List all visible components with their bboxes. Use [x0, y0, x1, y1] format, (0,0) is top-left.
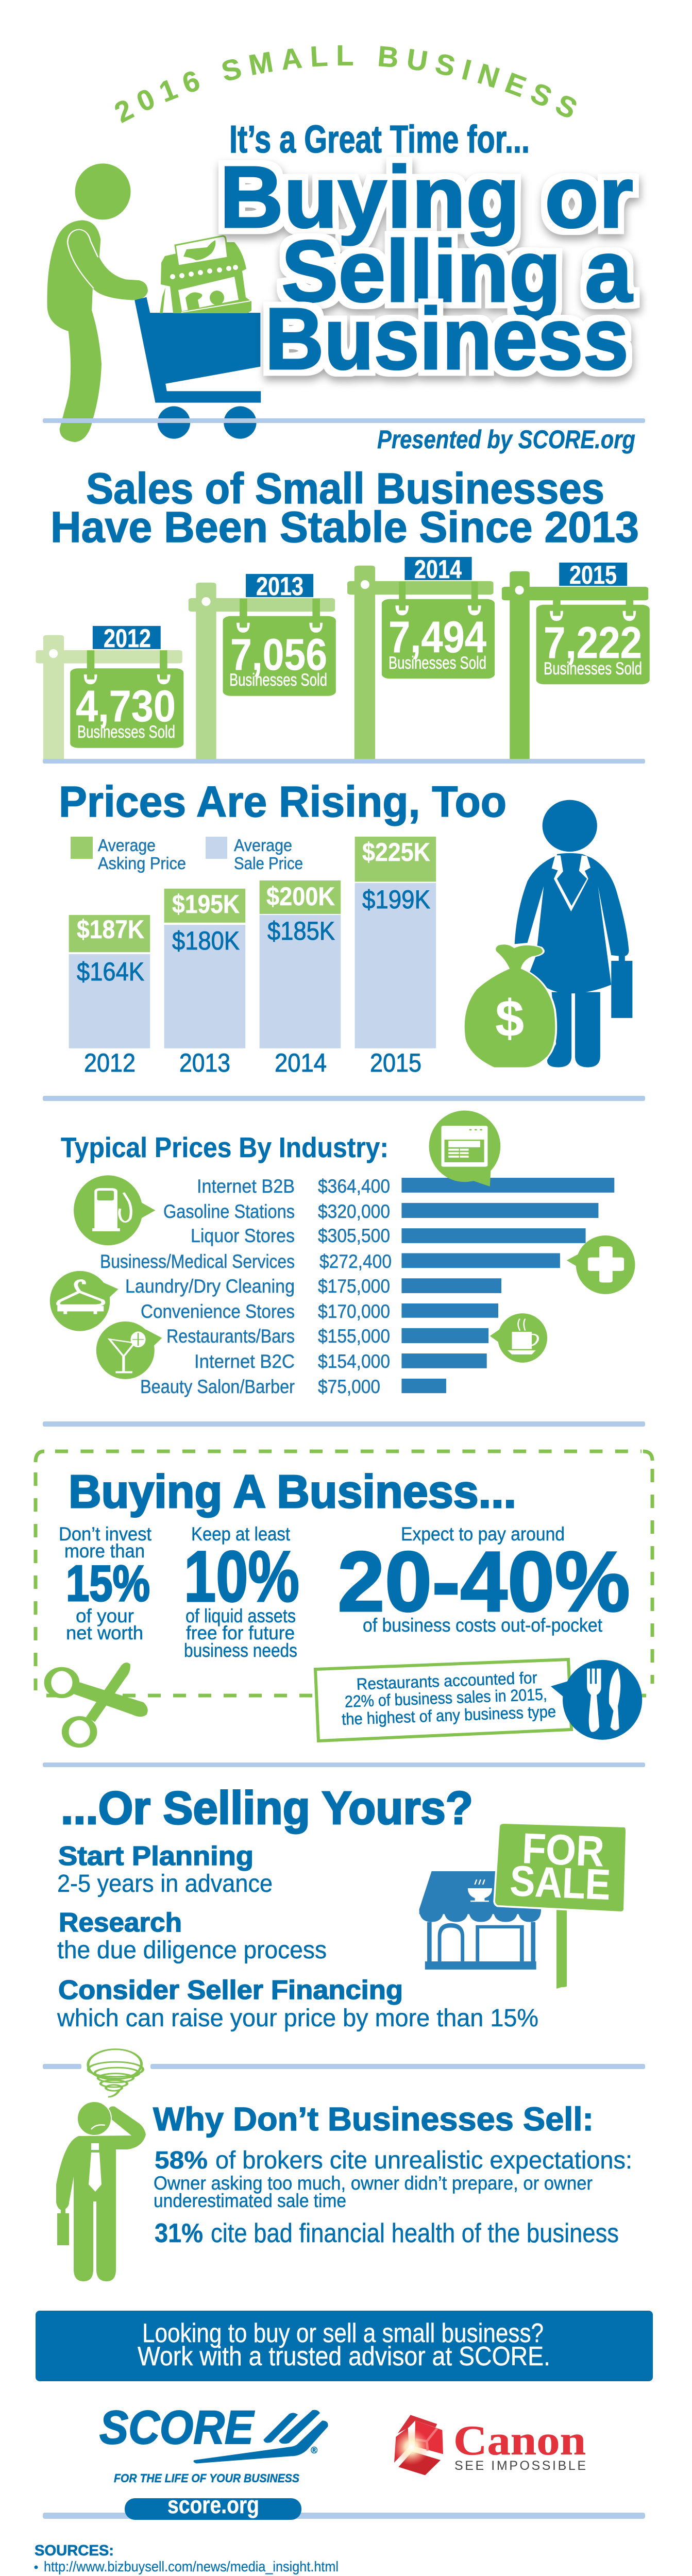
bar chart: typical prices by industry: Gasoline Stations	[163, 1201, 295, 1222]
Canon logo: Canon	[453, 2417, 586, 2464]
bar chart: typical prices by industry: Business/Medical Services	[100, 1251, 295, 1272]
signpost 2012	[36, 624, 183, 759]
stat: 10 percent	[184, 1523, 299, 1661]
main title: Buying or Selling a Business	[220, 148, 633, 388]
bar chart: typical prices by industry: $155,000	[318, 1326, 390, 1347]
signpost 2012: Businesses Sold	[77, 722, 175, 742]
signpost 2013: 2013	[256, 572, 303, 601]
shopping cart	[134, 297, 261, 439]
sources	[34, 2543, 538, 2576]
heading: sales of small businesses: Have Been Stable Since 2013	[50, 503, 639, 551]
stat: 15 percent: of your	[76, 1605, 134, 1626]
arched heading: 2016 small business: 2016 SMALL BUSINESS	[115, 45, 576, 123]
shop sign with croissant	[175, 236, 228, 266]
divider with score.org pill: score.org	[167, 2492, 259, 2518]
bar chart: typical prices by industry: Liquor Stores	[191, 1225, 295, 1246]
dashed cut-out border	[36, 1451, 652, 1696]
signpost 2012: 4,730	[76, 682, 176, 731]
SCORE logo: SCORE	[99, 2401, 255, 2454]
callout: restaurants: Restaurants accounted for	[356, 1668, 537, 1693]
bar chart: asking and sale prices: $200K	[266, 882, 335, 911]
SCORE logo: ®	[311, 2445, 317, 2455]
signpost 2013	[189, 572, 336, 759]
stat: 58 percent: 58%	[155, 2147, 208, 2174]
callout: restaurants: 22% of business sales in 2015,	[344, 1685, 547, 1711]
shopper figure	[47, 163, 148, 442]
heading: why don't businesses sell: Why Don’t Businesses Sell:	[153, 2100, 594, 2138]
scribble	[78, 2044, 151, 2097]
stat: 15 percent: Don’t invest	[59, 1523, 152, 1545]
legend: Average	[234, 836, 292, 855]
main title: Buying or Selling a Business: Buying or	[220, 148, 633, 246]
icon: worried person with scribble	[56, 2044, 151, 2281]
signpost 2012: 2012	[104, 624, 151, 653]
signpost 2014	[347, 555, 495, 759]
callout: restaurants: the highest of any business type	[342, 1702, 556, 1728]
person	[56, 2102, 146, 2281]
tip: seller financing: Consider Seller Financing	[58, 1975, 403, 2005]
bar chart: typical prices by industry: Restaurants/Bars	[166, 1326, 295, 1347]
stat: 20-40 percent: of business costs out-of-pocket	[363, 1615, 603, 1636]
bar chart: typical prices by industry: Convenience Stores	[141, 1301, 295, 1322]
money bag	[465, 944, 555, 1067]
stat: 10 percent: free for future	[186, 1622, 295, 1643]
bar chart: typical prices by industry: $154,000	[318, 1351, 390, 1372]
bar chart: typical prices by industry: $272,400	[319, 1251, 392, 1272]
bar chart: typical prices by industry	[100, 1176, 614, 1397]
bar chart: typical prices by industry: $364,400	[318, 1176, 390, 1197]
tip: start planning: 2-5 years in advance	[57, 1870, 273, 1897]
main title: Buying or Selling a Business: Selling a	[281, 223, 633, 320]
legend	[71, 836, 303, 873]
tip: seller financing	[57, 1975, 538, 2032]
signpost 2015	[502, 561, 650, 759]
chart: for-sale signposts of businesses sold	[36, 555, 650, 759]
main title: Buying or Selling a Business: Business	[265, 290, 629, 388]
bar chart: typical prices by industry: Laundry/Dry Cleaning	[125, 1276, 295, 1297]
tip: start planning: Start Planning	[58, 1841, 254, 1871]
panel: buying a business	[36, 1451, 652, 1745]
Canon logo: SEE IMPOSSIBLE	[454, 2459, 586, 2473]
signpost 2013: 7,056	[230, 630, 327, 680]
bar chart: asking and sale prices: $187K	[77, 915, 144, 944]
signpost 2013: Businesses Sold	[229, 670, 327, 690]
bar chart: asking and sale prices: 2014	[275, 1048, 327, 1077]
sources: http://www.bizbuysell.com/news/media_insight.html	[44, 2558, 339, 2574]
presented by line: Presented by SCORE.org	[377, 425, 635, 454]
call-to-action banner: Work with a trusted advisor at SCORE.	[138, 2342, 550, 2371]
call-to-action banner: Looking to buy or sell a small business?	[142, 2318, 544, 2348]
bar chart: typical prices by industry: $175,000	[318, 1276, 390, 1297]
icon: coffee cup bubble	[490, 1313, 547, 1363]
tip: research	[57, 1908, 327, 1964]
icon: for sale sign: SALE	[509, 1857, 612, 1909]
bar chart: typical prices by industry: $320,000	[318, 1201, 390, 1222]
heading: prices are rising: Prices Are Rising, Too	[59, 777, 507, 826]
awning scallops	[170, 265, 238, 279]
stat: 31 percent: 31%	[155, 2218, 203, 2248]
stat: 10 percent: 10%	[184, 1536, 299, 1617]
heading: typical prices by industry: Typical Prices By Industry:	[61, 1131, 389, 1163]
stat: 10 percent: business needs	[184, 1640, 297, 1661]
icon: storefront	[419, 1871, 541, 1970]
SCORE logo: FOR THE LIFE OF YOUR BUSINESS	[114, 2471, 300, 2485]
heading: sales of small businesses	[50, 464, 639, 551]
icon: martini bubble	[96, 1321, 162, 1379]
bar chart: asking and sale prices: $199K	[362, 885, 430, 914]
stat: 15 percent: net worth	[66, 1622, 143, 1643]
icon: gas pump bubble	[74, 1175, 155, 1245]
signpost 2015: Businesses Sold	[544, 659, 642, 679]
signpost 2014: 2014	[414, 555, 462, 584]
stat: 10 percent: of liquid assets	[185, 1605, 296, 1626]
signpost 2015: 7,222	[544, 618, 642, 668]
icon: storefront in the cart	[160, 236, 251, 313]
bar chart: asking and sale prices: 2013	[179, 1048, 230, 1077]
signpost 2014: 7,494	[389, 613, 486, 662]
icon: scissors	[48, 1663, 148, 1745]
bar chart: typical prices by industry: Internet B2B	[197, 1176, 295, 1197]
icon: web page bubble	[429, 1111, 500, 1187]
tip: start planning	[57, 1841, 273, 1897]
call-to-action banner	[36, 2311, 653, 2381]
stat: 15 percent: 15%	[66, 1555, 150, 1612]
stat: 10 percent: Keep at least	[191, 1523, 291, 1545]
stat: 20-40 percent: Expect to pay around	[401, 1523, 565, 1545]
icon: businesswoman with money bag	[465, 800, 632, 1067]
heading: sales of small businesses: Sales of Small Businesses	[86, 464, 604, 513]
stat: 15 percent	[59, 1523, 152, 1643]
callout: restaurants	[315, 1659, 571, 1741]
legend: Asking Price	[98, 854, 186, 873]
stat: 20-40 percent: 20-40%	[337, 1534, 630, 1630]
stat: 15 percent: more than	[64, 1540, 145, 1562]
stat: 31 percent: cite bad financial health of the business	[211, 2218, 619, 2248]
tip: research: Research	[59, 1908, 182, 1938]
icon: for sale sign	[495, 1824, 626, 1989]
divider with gap for scribble	[43, 2064, 645, 2069]
bar chart: asking and sale prices: 2012	[84, 1048, 136, 1077]
icon: red cube	[393, 2415, 443, 2475]
signpost 2014: Businesses Sold	[389, 653, 486, 673]
icon: green shopper pushing cart	[47, 163, 261, 442]
stat: 58 percent: of brokers cite unrealistic expectations:	[215, 2147, 632, 2174]
legend: Sale Price	[234, 854, 303, 873]
Canon logo	[393, 2415, 586, 2475]
bar chart: asking and sale prices: $164K	[77, 957, 144, 986]
icon: for sale sign: FOR	[521, 1824, 605, 1875]
bar chart: typical prices by industry: Internet B2C	[194, 1351, 295, 1372]
legend: Average	[98, 836, 156, 855]
bar chart: asking and sale prices: 2015	[370, 1048, 421, 1077]
signpost 2015: 2015	[569, 561, 617, 589]
bar chart: typical prices by industry: $170,000	[318, 1301, 390, 1322]
tip: research: the due diligence process	[57, 1937, 327, 1964]
tip: seller financing: which can raise your price by more than 15%	[57, 2005, 538, 2032]
businesswoman	[515, 800, 632, 1067]
sources: SOURCES:	[35, 2543, 114, 2559]
bar chart: typical prices by industry: $75,000	[318, 1376, 380, 1397]
heading: buying a business: Buying A Business...	[69, 1466, 516, 1518]
stat: 58 percent: underestimated sale time	[154, 2190, 346, 2211]
bar chart: asking and sale prices: $195K	[172, 890, 240, 919]
bar chart: typical prices by industry: Beauty Salon/Barber	[140, 1376, 295, 1397]
subtitle: It’s a Great Time for...	[229, 117, 530, 161]
icon: medical cross bubble	[567, 1235, 635, 1294]
bar chart: asking and sale prices: $185K	[267, 917, 335, 945]
heading: or selling yours: ...Or Selling Yours?	[61, 1783, 473, 1834]
selling tips	[57, 1841, 538, 2032]
icon: fork and knife bubble	[551, 1660, 642, 1740]
bar chart: asking and sale prices	[69, 837, 436, 1077]
bar chart: asking and sale prices: $225K	[362, 838, 430, 867]
bar chart: typical prices by industry: $305,500	[318, 1225, 390, 1246]
stat: 58 percent	[154, 2147, 632, 2211]
stat: 58 percent: Owner asking too much, owner didn’t prepare, or owner	[154, 2173, 593, 2194]
industry icons	[50, 1111, 635, 1379]
bar chart: asking and sale prices: $180K	[172, 926, 240, 955]
SCORE logo	[99, 2401, 328, 2485]
shop window	[178, 277, 239, 311]
divider with score.org pill	[43, 2492, 645, 2520]
icon: clothes hanger bubble	[50, 1271, 119, 1331]
icon: businesswoman with money bag: $	[495, 990, 524, 1047]
